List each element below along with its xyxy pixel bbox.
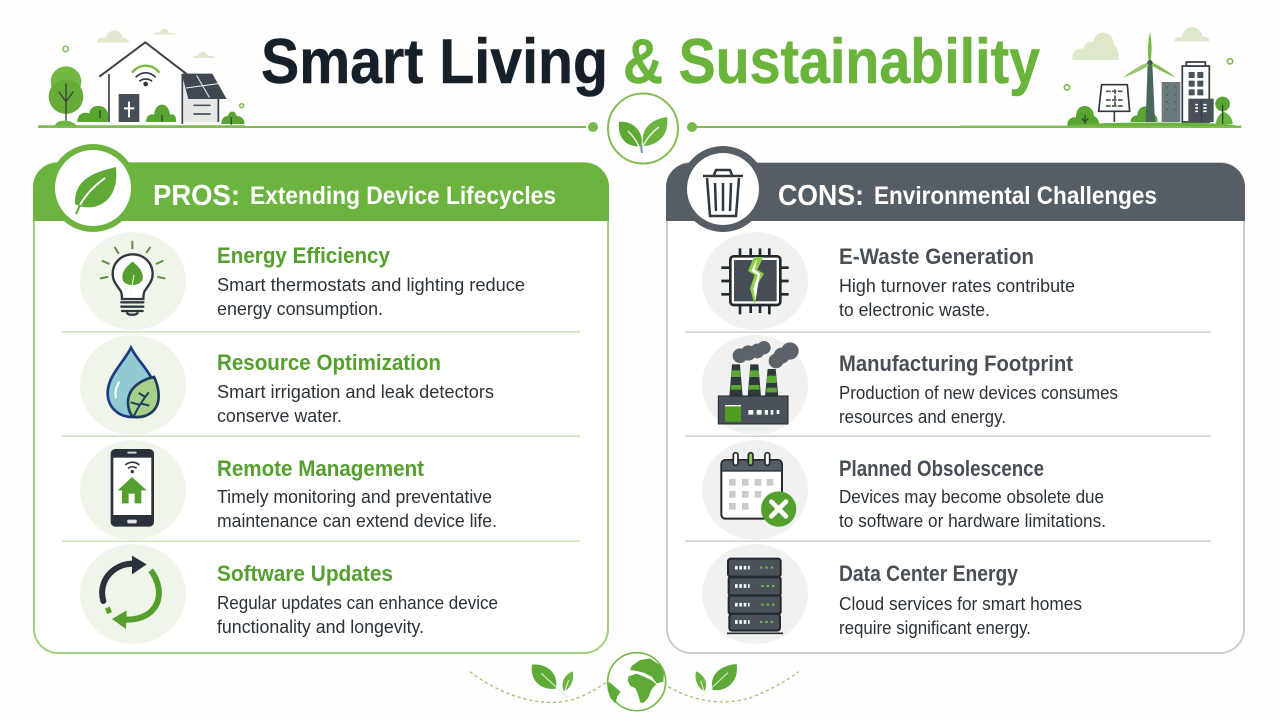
title: Smart Living: [261, 27, 608, 97]
cons item: data center energy: require significant energy.: [839, 618, 1031, 638]
icon: leaves left: [532, 665, 573, 698]
pros item: software updates: [217, 561, 498, 637]
pros icon backgrounds: [80, 232, 186, 644]
cons item: data center energy: Cloud services for smart homes: [839, 594, 1082, 614]
icon: cracked chip: [721, 248, 789, 314]
icon: water drop with leaf: [108, 348, 159, 417]
cons item: manufacturing footprint: Manufacturing Footprint: [839, 351, 1074, 376]
dashed vine left: [470, 672, 607, 702]
icon: globe: [608, 653, 666, 711]
cons item: e-waste generation: [839, 244, 1075, 320]
cons heading: Environmental Challenges: [874, 182, 1157, 210]
pros item: remote management: [217, 456, 497, 531]
icon: leaves right: [696, 664, 737, 697]
icon: server rack: [727, 559, 783, 633]
icon: header sprout badge: [608, 94, 678, 164]
pros item: energy efficiency: [217, 243, 525, 319]
pros item: software updates: Regular updates can enhance device: [217, 593, 498, 613]
illustration: smart home: [39, 29, 245, 127]
footer: globe and leaves: [470, 653, 798, 711]
icon: update cycle arrows: [102, 556, 159, 629]
pros heading: [153, 180, 556, 212]
title: [261, 27, 1040, 97]
pros item: energy efficiency: energy consumption.: [217, 299, 383, 319]
pros item: energy efficiency: Energy Efficiency: [217, 243, 391, 268]
panel: pros: [33, 144, 609, 653]
pros item: remote management: Remote Management: [217, 456, 425, 481]
cons header bar: [666, 163, 1245, 221]
cons item: e-waste generation: High turnover rates contribute: [839, 276, 1075, 296]
header divider line left: [38, 122, 598, 132]
cons item: planned obsolescence: [839, 456, 1106, 531]
pros item: software updates: functionality and longevity.: [217, 617, 424, 637]
dashed vine right: [668, 672, 798, 702]
pros item: resource optimization: conserve water.: [217, 406, 342, 426]
icon: factory with smoke: [718, 341, 799, 424]
cons heading: [778, 180, 1157, 212]
pros item: energy efficiency: Smart thermostats and lighting reduce: [217, 275, 525, 295]
cons item: manufacturing footprint: [839, 351, 1118, 427]
pros header bar: [33, 163, 609, 221]
illustration: green city: [960, 27, 1241, 127]
pros heading: Extending Device Lifecycles: [250, 182, 556, 210]
icon: light bulb with leaf: [101, 242, 165, 315]
cons item: planned obsolescence: Planned Obsolescence: [839, 456, 1044, 481]
icon: calendar with x: [721, 453, 796, 527]
pros item: resource optimization: Resource Optimization: [217, 350, 441, 375]
pros item: remote management: maintenance can extend device life.: [217, 511, 497, 531]
pros item: software updates: Software Updates: [217, 561, 393, 586]
panel: cons: [666, 146, 1245, 653]
pros item: remote management: Timely monitoring and preventative: [217, 487, 492, 507]
pros heading: PROS:: [153, 180, 240, 212]
cons item: manufacturing footprint: resources and energy.: [839, 407, 1006, 427]
cons icon backgrounds: [702, 232, 808, 644]
cons heading: CONS:: [778, 180, 864, 212]
cons item: planned obsolescence: Devices may become obsolete due: [839, 487, 1104, 507]
header divider line right: [687, 122, 1241, 132]
icon: trash can badge: [680, 146, 766, 232]
cons item: data center energy: [839, 561, 1082, 638]
cons item: planned obsolescence: to software or hardware limitations.: [839, 511, 1106, 531]
title: & Sustainability: [623, 27, 1040, 97]
cons item: manufacturing footprint: Production of new devices consumes: [839, 383, 1118, 403]
pros item: resource optimization: Smart irrigation and leak detectors: [217, 382, 494, 402]
icon: pros leaf badge: [49, 144, 137, 232]
cons item: e-waste generation: E-Waste Generation: [839, 244, 1034, 269]
cons item: data center energy: Data Center Energy: [839, 561, 1019, 586]
pros item: resource optimization: [217, 350, 494, 426]
icon: smartphone with home: [111, 449, 154, 527]
cons item: e-waste generation: to electronic waste.: [839, 300, 990, 320]
